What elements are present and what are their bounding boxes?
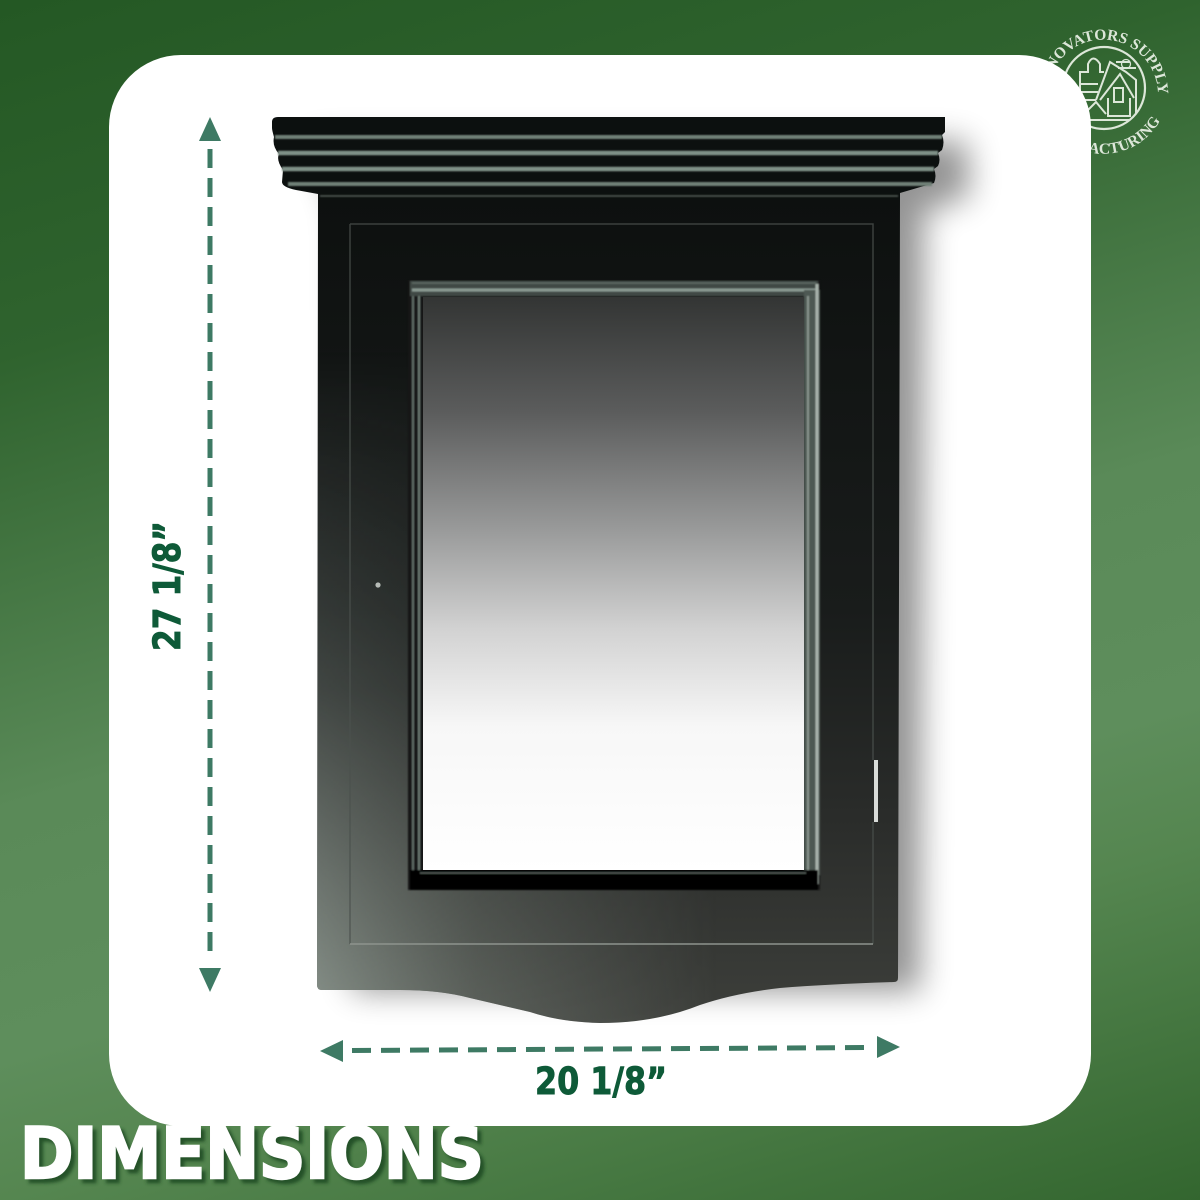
- crown moulding: [272, 117, 945, 199]
- cabinet shadow: [312, 141, 970, 991]
- mirror cabinet: [272, 117, 970, 1030]
- logo text: bottom: ACTURING: [1091, 116, 1160, 154]
- door knob: [375, 582, 381, 588]
- logo house: [1080, 58, 1136, 120]
- arrow: height dimension: [199, 117, 221, 992]
- logo text: top: ENOVATORS SUPPLY: [1048, 30, 1168, 94]
- door outline: [350, 224, 873, 944]
- cabinet body: [317, 198, 900, 1023]
- lower left sheen: [317, 428, 654, 1023]
- mirror frame moulding: [408, 280, 820, 890]
- label: width: 20 1/8”: [535, 1060, 667, 1103]
- title: DIMENSIONS: [24, 1117, 488, 1199]
- label: height: 27 1/8”: [146, 521, 189, 651]
- title: DIMENSIONS: [20, 1113, 484, 1195]
- white panel: [109, 55, 1091, 1126]
- arrow: width dimension: [320, 1036, 900, 1062]
- mirror glass: [423, 297, 804, 870]
- logo: Renovators Supply Manufacturing: [1048, 30, 1168, 154]
- hinge: [874, 760, 878, 822]
